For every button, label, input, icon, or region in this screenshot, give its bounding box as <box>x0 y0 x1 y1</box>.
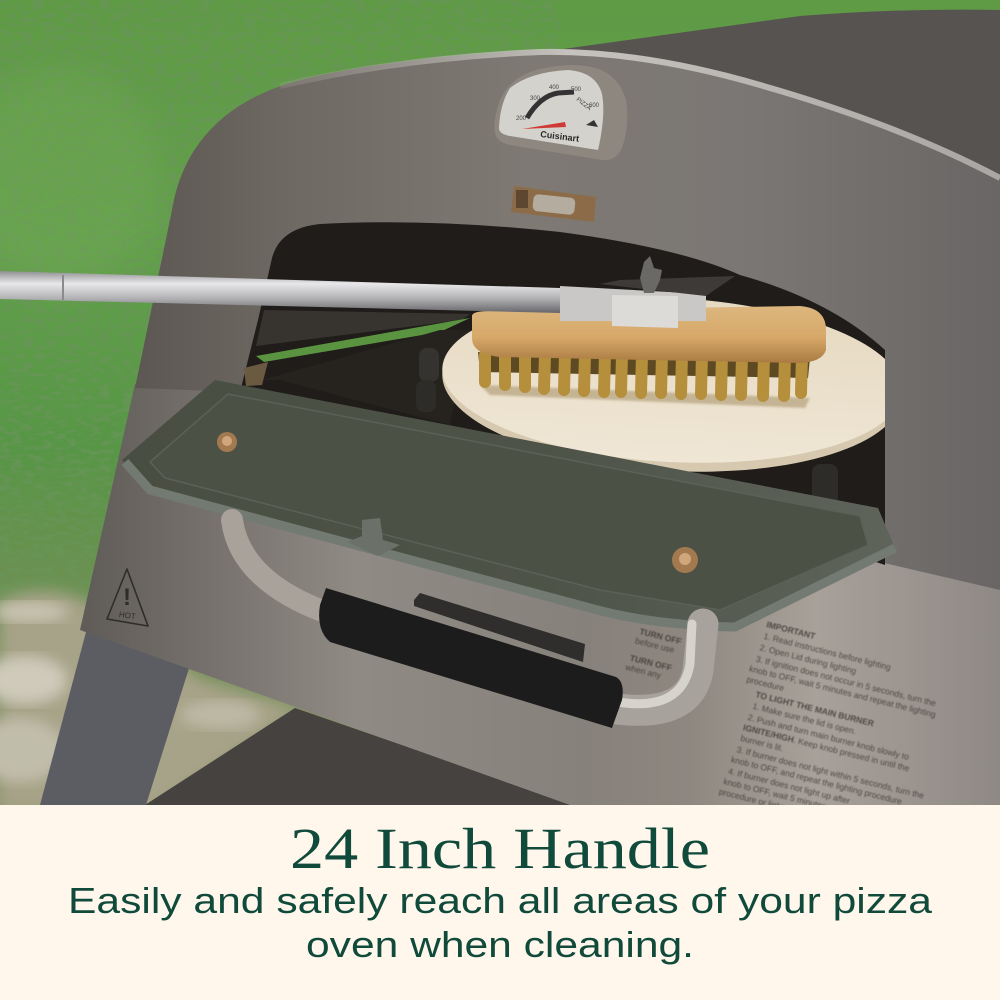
temperature gauge: 300 <box>530 96 541 102</box>
oven opening <box>240 222 885 565</box>
brush metal bracket <box>560 256 735 328</box>
oven front arch <box>135 50 1000 590</box>
instruction text on panel: IGNITE/HIGH. Keep knob pressed in until the <box>742 722 911 773</box>
brush handle rod <box>0 271 560 313</box>
instruction text on panel: 1. Make sure the lid is open. <box>752 701 857 736</box>
instruction text on panel: 3. If ignition does not occur in 5 seconds, turn the <box>755 654 937 708</box>
instruction text on panel: IMPORTANT <box>766 619 817 641</box>
oven grate <box>262 330 838 508</box>
instruction text on panel: TO LIGHT THE MAIN BURNER <box>755 689 875 728</box>
door handle black grip <box>319 588 623 728</box>
caption background <box>0 805 1000 1000</box>
instruction text on panel: before use <box>634 635 676 655</box>
caption heading: 24 Inch Handle <box>290 816 710 881</box>
instruction text on panel: 1. Read instructions before lighting <box>763 631 892 672</box>
instruction text on panel: TURN OFF <box>639 626 683 646</box>
view through oven to grass <box>256 310 470 346</box>
igniter bracket <box>511 186 596 222</box>
lower stainless panel <box>80 380 1000 805</box>
arch top rim highlight <box>280 52 1000 178</box>
instruction text on panel: when any <box>624 662 663 681</box>
door hinge bolt <box>244 362 268 386</box>
door latch <box>414 593 585 662</box>
temperature gauge: 500 <box>571 87 582 93</box>
warning label: hot: ! <box>123 584 131 611</box>
warning label: hot <box>107 569 148 626</box>
caption body text <box>68 880 933 965</box>
instruction text on panel: TURN OFF <box>629 653 673 673</box>
caption body text: oven when cleaning. <box>306 924 694 965</box>
temperature gauge: 400 <box>549 85 560 91</box>
instruction text on panel: burner is lit. <box>740 733 785 753</box>
caption body text: Easily and safely reach all areas of your pizza <box>68 880 933 921</box>
gravel patch at lower left <box>0 591 300 810</box>
warning label: hot: HOT <box>118 610 136 621</box>
temperature gauge: 600 <box>589 103 600 109</box>
temperature gauge: 200 <box>516 116 527 122</box>
door handle tubes <box>232 520 703 710</box>
instruction text on panel: procedure <box>746 674 785 693</box>
pizza stone <box>442 300 885 472</box>
instruction text on panel: knob to OFF, and repeat the lighting procedure <box>730 754 903 807</box>
oven leg <box>40 632 190 805</box>
instruction text on panel <box>624 618 949 844</box>
oven door <box>122 380 895 627</box>
brush wooden block <box>472 306 826 363</box>
instruction text on panel: knob to OFF, wait 5 minutes and repeat the lighting <box>748 663 937 720</box>
lower shelf <box>145 708 575 805</box>
oven back hood <box>520 10 1000 190</box>
brush bristles <box>478 352 810 396</box>
temperature gauge <box>495 65 627 160</box>
temperature gauge: PIZZA <box>575 97 592 112</box>
instruction text on panel: 4. If burner does not light up after <box>727 766 851 806</box>
instruction text on panel: 2. Push and turn main burner knob slowly to <box>747 712 910 762</box>
temperature gauge: Cuisinart <box>540 129 580 144</box>
instruction text on panel: 2. Open Lid during lighting <box>759 642 858 676</box>
bristle shadow on stone <box>480 385 810 408</box>
instruction text on panel: 3. If burner does not light within 5 seconds, turn the <box>736 744 925 801</box>
instruction text on panel: procedure or light <box>718 786 785 812</box>
instruction text on panel: knob to OFF, wait 5 minutes <box>723 776 827 811</box>
